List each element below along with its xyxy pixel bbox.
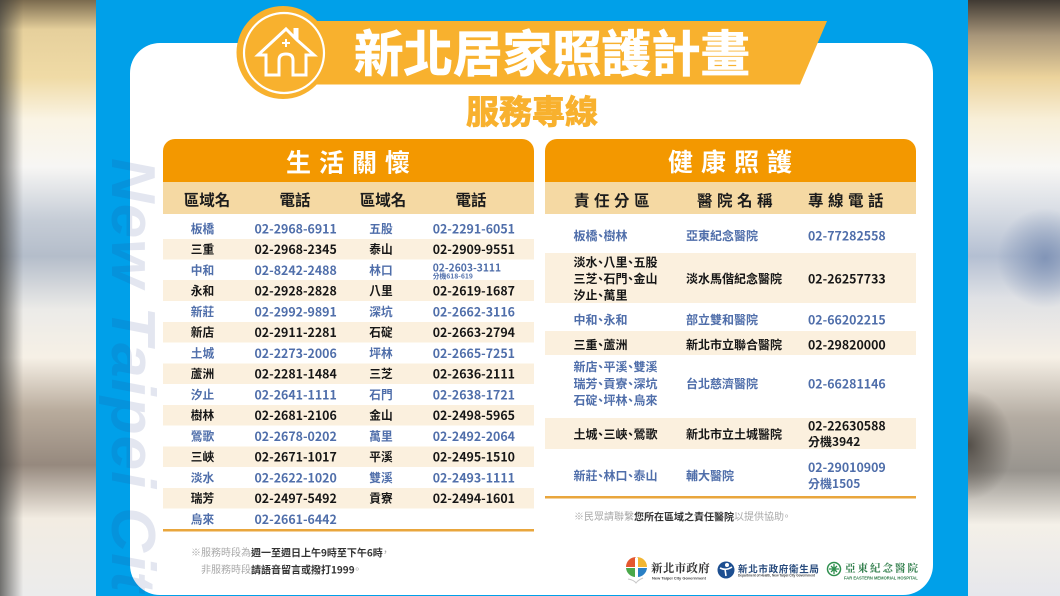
row 7: 02-2665-7251 [433,344,515,362]
logo: 新北市政府衛生局 [718,562,820,578]
row 14: 瑞芳 [191,490,214,507]
row 2: 三重 [191,241,214,258]
row 14: 貢寮 [369,490,393,507]
row 6 [191,323,515,341]
row 10: 樹林 [191,407,214,424]
row 13: 02-2493-1111 [433,468,515,486]
row 4: 02-2619-1687 [433,282,515,300]
row 15: 烏來 [191,510,214,528]
row 12: 02-2495-1510 [433,448,515,466]
column header band: 責任分區 [574,189,654,211]
panel header bar [545,139,916,182]
row 1 [191,219,515,237]
service hours note: 非服務時段請語音留言或撥打1999。 [201,561,360,576]
circular house badge [236,6,330,99]
row 6: 新店 [191,324,214,341]
logo: 新北市政府 [626,557,710,583]
column header band: 電話 [279,188,311,210]
main title: 新北居家照護計畫 [354,16,750,86]
row: 淡水馬偕紀念醫院: 02-26257733 [808,270,886,288]
row: 輔大醫院: 輔大醫院 [686,467,734,484]
column header band [163,182,534,214]
row: 台北慈濟醫院: 台北慈濟醫院 [686,375,758,392]
row 1: 板橋 [191,220,214,237]
row 5: 深坑 [369,303,393,320]
row 2: 02-2909-9551 [433,240,515,258]
row 9: 02-2638-1721 [433,385,515,403]
row: 亞東紀念醫院: 02-77282558 [808,226,886,244]
column header band: 區域名 [184,188,230,210]
row 7: 02-2273-2006 [254,344,337,362]
row 3: 林口 [369,261,393,278]
row 5: 新莊 [191,303,214,320]
row 6: 02-2911-2281 [254,323,337,341]
row 15: 02-2661-6442 [254,510,337,528]
row 12: 02-2671-1017 [254,448,337,466]
row 13: 02-2622-1020 [254,468,337,486]
row: 新北市立土城醫院: 分機3942 [808,433,860,450]
panel heading: 健康照護 [668,143,800,179]
row 4 [191,282,515,300]
row 11: 萬里 [369,427,393,444]
row 13 [191,468,515,486]
row 3: 02-8242-2488 [254,261,337,279]
row 5 [191,302,515,320]
subtitle: 服務專線 [466,86,598,134]
row: 新北市立聯合醫院: 三重、蘆洲 [574,336,628,353]
column header band: 區域名 [360,188,406,210]
row: 新北市立土城醫院: 新北市立土城醫院 [686,426,782,442]
logo: 新北市政府衛生局: 新北市政府衛生局 [738,562,820,576]
row 14 [191,489,515,507]
row 1: 五股 [369,220,393,237]
row 10: 02-2681-2106 [254,406,337,424]
row 7: 坪林 [369,344,393,361]
row 11: 02-2678-0202 [254,427,337,445]
row: 新北市立土城醫院: 土城、三峽、鶯歌 [574,426,658,442]
column header band: 醫院名稱 [697,189,777,211]
row: 亞東紀念醫院: 亞東紀念醫院 [686,227,758,244]
row: 亞東紀念醫院: 板橋、樹林 [574,227,628,244]
panel heading: 生活關懷 [286,144,418,180]
panel: 生活關懷 [163,139,534,576]
row 8: 02-2636-2111 [433,365,515,383]
hospital table rows [574,226,886,492]
district phone table rows [191,219,515,528]
row 4: 八里 [369,282,393,299]
row 5: 02-2662-3116 [433,302,515,320]
row 4: 02-2928-2828 [254,282,337,300]
row 9 [191,385,515,403]
row: 新北市立聯合醫院: 02-29820000 [808,335,886,353]
row: 台北慈濟醫院: 瑞芳、貢寮、深坑 [574,375,658,392]
row 2: 02-2968-2345 [254,240,337,258]
row: 淡水馬偕紀念醫院: 淡水、八里、五股 [574,254,658,270]
watermark: New Taipei City: New Taipei Cit [98,158,167,594]
row 13: 雙溪 [369,469,393,486]
row 12: 三峽 [191,448,214,465]
table row stripes [163,239,534,508]
row 9: 石門 [369,386,393,403]
column header band: 電話 [455,188,487,210]
row 6: 石碇 [369,324,393,341]
row: 部立雙和醫院: 中和、永和 [574,311,628,328]
row 8: 蘆洲 [191,365,214,382]
row 3: 分機618-619 [433,271,473,281]
column header band: 專線電話 [808,189,888,211]
row 4: 永和 [191,282,214,299]
service hours note [191,544,388,576]
row: 新北市立土城醫院: 02-22630588 [808,416,886,434]
banner ribbon [290,21,827,84]
logo: 亞東紀念醫院: FAR EASTERN MEMORIAL HOSPITAL [844,576,918,580]
logo: 亞東紀念醫院: 亞東紀念醫院 [845,560,920,576]
row 1: 02-2968-6911 [254,219,337,237]
row 3: 中和 [191,261,214,278]
row 14: 02-2494-1601 [433,489,515,507]
row: 部立雙和醫院: 部立雙和醫院 [686,311,758,328]
row: 新北市立土城醫院 [574,416,886,450]
row 13: 淡水 [191,469,214,486]
row 2 [191,240,515,258]
row 5: 02-2992-9891 [254,302,337,320]
row 6: 02-2663-2794 [433,323,515,341]
row 12: 平溪 [369,448,393,465]
row: 輔大醫院 [574,458,886,492]
row 11: 02-2492-2064 [433,427,515,445]
row 9: 02-2641-1111 [254,385,337,403]
row 7 [191,344,515,362]
white content card [130,43,933,595]
row 10: 02-2498-5965 [433,406,515,424]
table row stripes [545,253,916,449]
row 10: 金山 [369,407,393,424]
service hours note: ※服務時段為週一至週日上午9時至下午6時， [191,544,388,559]
row 7: 土城 [191,344,214,361]
row 8: 02-2281-1484 [254,365,337,383]
panel header bar [163,139,534,182]
blurred photo background: right side [923,0,1060,596]
row: 輔大醫院: 分機1505 [808,475,860,492]
row 11 [191,427,515,445]
row 9: 汐止 [191,386,214,403]
logo: 新北市政府: New Taipei City Government [652,576,707,580]
row: 部立雙和醫院 [574,310,886,328]
logo: 新北市政府衛生局: Department of Health, New Taipei City Government [738,574,816,578]
row: 輔大醫院: 新莊、林口、泰山 [574,467,658,484]
row: 新北市立聯合醫院 [574,335,886,353]
row: 台北慈濟醫院 [574,358,886,408]
row 15 [191,510,337,528]
icon: house with cross [258,29,314,75]
row: 淡水馬偕紀念醫院: 淡水馬偕紀念醫院 [686,270,782,287]
logo: 亞東紀念醫院 [828,560,920,580]
row: 台北慈濟醫院: 02-66281146 [808,374,886,392]
column header band [545,182,916,214]
row: 輔大醫院: 02-29010909 [808,458,886,476]
row: 部立雙和醫院: 02-66202215 [808,310,886,328]
row 8: 三芝 [369,365,393,382]
title banner [236,6,827,99]
row: 淡水馬偕紀念醫院 [574,254,886,304]
row 3 [191,260,501,281]
row: 淡水馬偕紀念醫院: 三芝、石門、金山 [574,270,658,287]
contact note: ※民眾請聯繫您所在區域之責任醫院以提供協助。 [574,508,789,523]
row 11: 鶯歌 [191,427,214,444]
row: 亞東紀念醫院 [574,226,886,244]
panel: 健康照護 [545,139,916,523]
row 12 [191,448,515,466]
row 14: 02-2497-5492 [254,489,337,507]
logos row [626,557,920,583]
row 2: 泰山 [369,241,393,258]
row 10 [191,406,515,424]
row: 新北市立聯合醫院: 新北市立聯合醫院 [686,336,782,353]
row 3: 02-2603-3111 [433,260,501,274]
row 8 [191,365,515,383]
logo: 新北市政府: 新北市政府 [651,560,710,576]
row: 台北慈濟醫院: 石碇、坪林、烏來 [574,392,658,408]
row 1: 02-2291-6051 [433,219,515,237]
blurred photo background: left side [0,0,97,596]
row: 淡水馬偕紀念醫院: 汐止、萬里 [574,286,628,304]
row: 台北慈濟醫院: 新店、平溪、雙溪 [574,358,658,375]
